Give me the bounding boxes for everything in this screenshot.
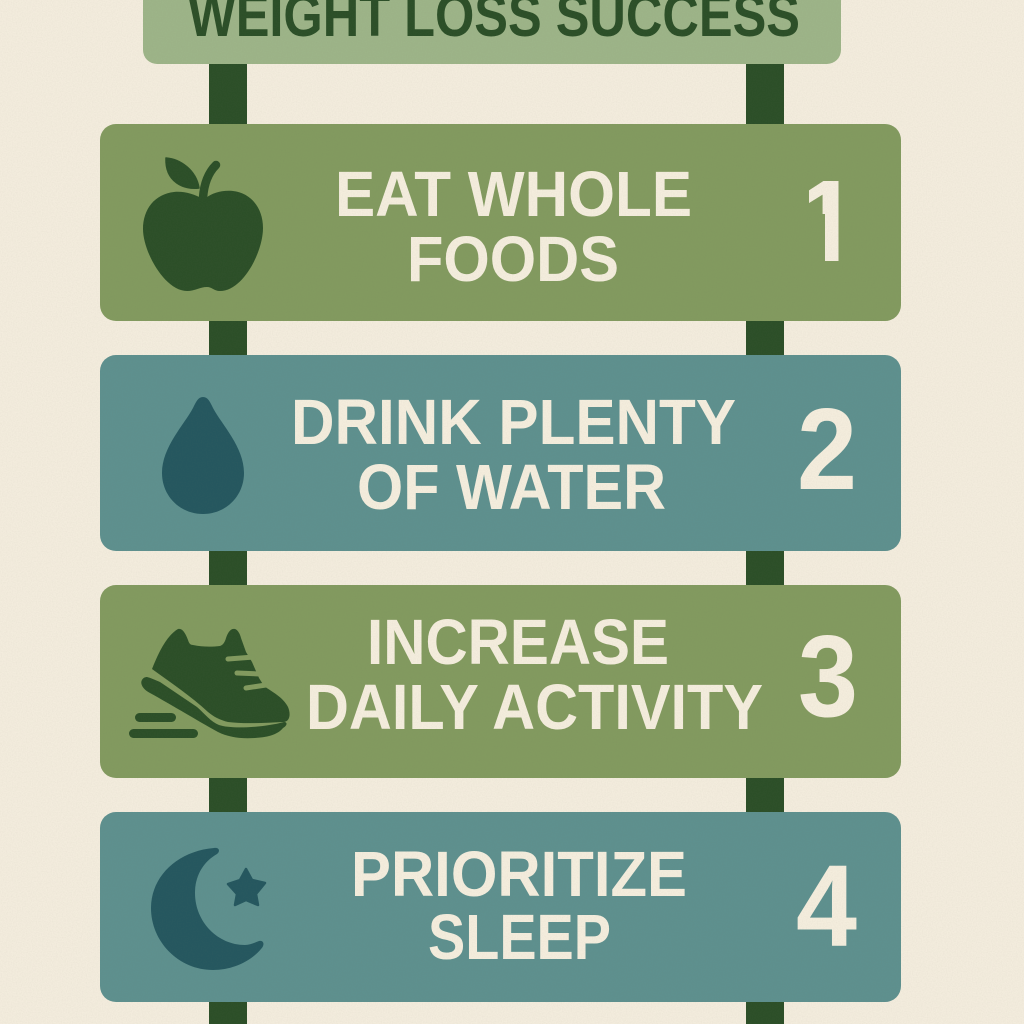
step 4 label: PRIORITIZE [351,838,687,910]
icon: running shoe [129,629,290,738]
step 1 label [335,158,692,295]
title banner [143,0,841,64]
step 3 label [306,606,763,743]
sign posts [209,60,784,1024]
number 2: 2 [797,384,857,514]
step 4 label [351,838,687,973]
step 2 label: OF WATER [357,451,666,523]
icon: water drop [162,397,244,514]
step 2 label [291,386,736,523]
step 3 label: DAILY ACTIVITY [306,671,763,743]
panel: step 4 prioritize sleep [100,812,901,1002]
icon: apple [143,158,263,291]
icon: moon and star [151,848,265,970]
step 1 label: FOODS [407,223,619,295]
panel: step 2 drink water [100,355,901,551]
number 4: 4 [796,841,857,971]
panel: step 3 daily activity [100,585,901,778]
step 4 label: SLEEP [428,901,611,973]
number 1: 1 [796,156,860,286]
panel: step 1 eat whole foods [100,124,901,321]
step 3 label: INCREASE [367,606,669,678]
number 3: 3 [798,611,858,741]
step 2 label: DRINK PLENTY [291,386,736,458]
step 1 label: EAT WHOLE [335,158,692,230]
